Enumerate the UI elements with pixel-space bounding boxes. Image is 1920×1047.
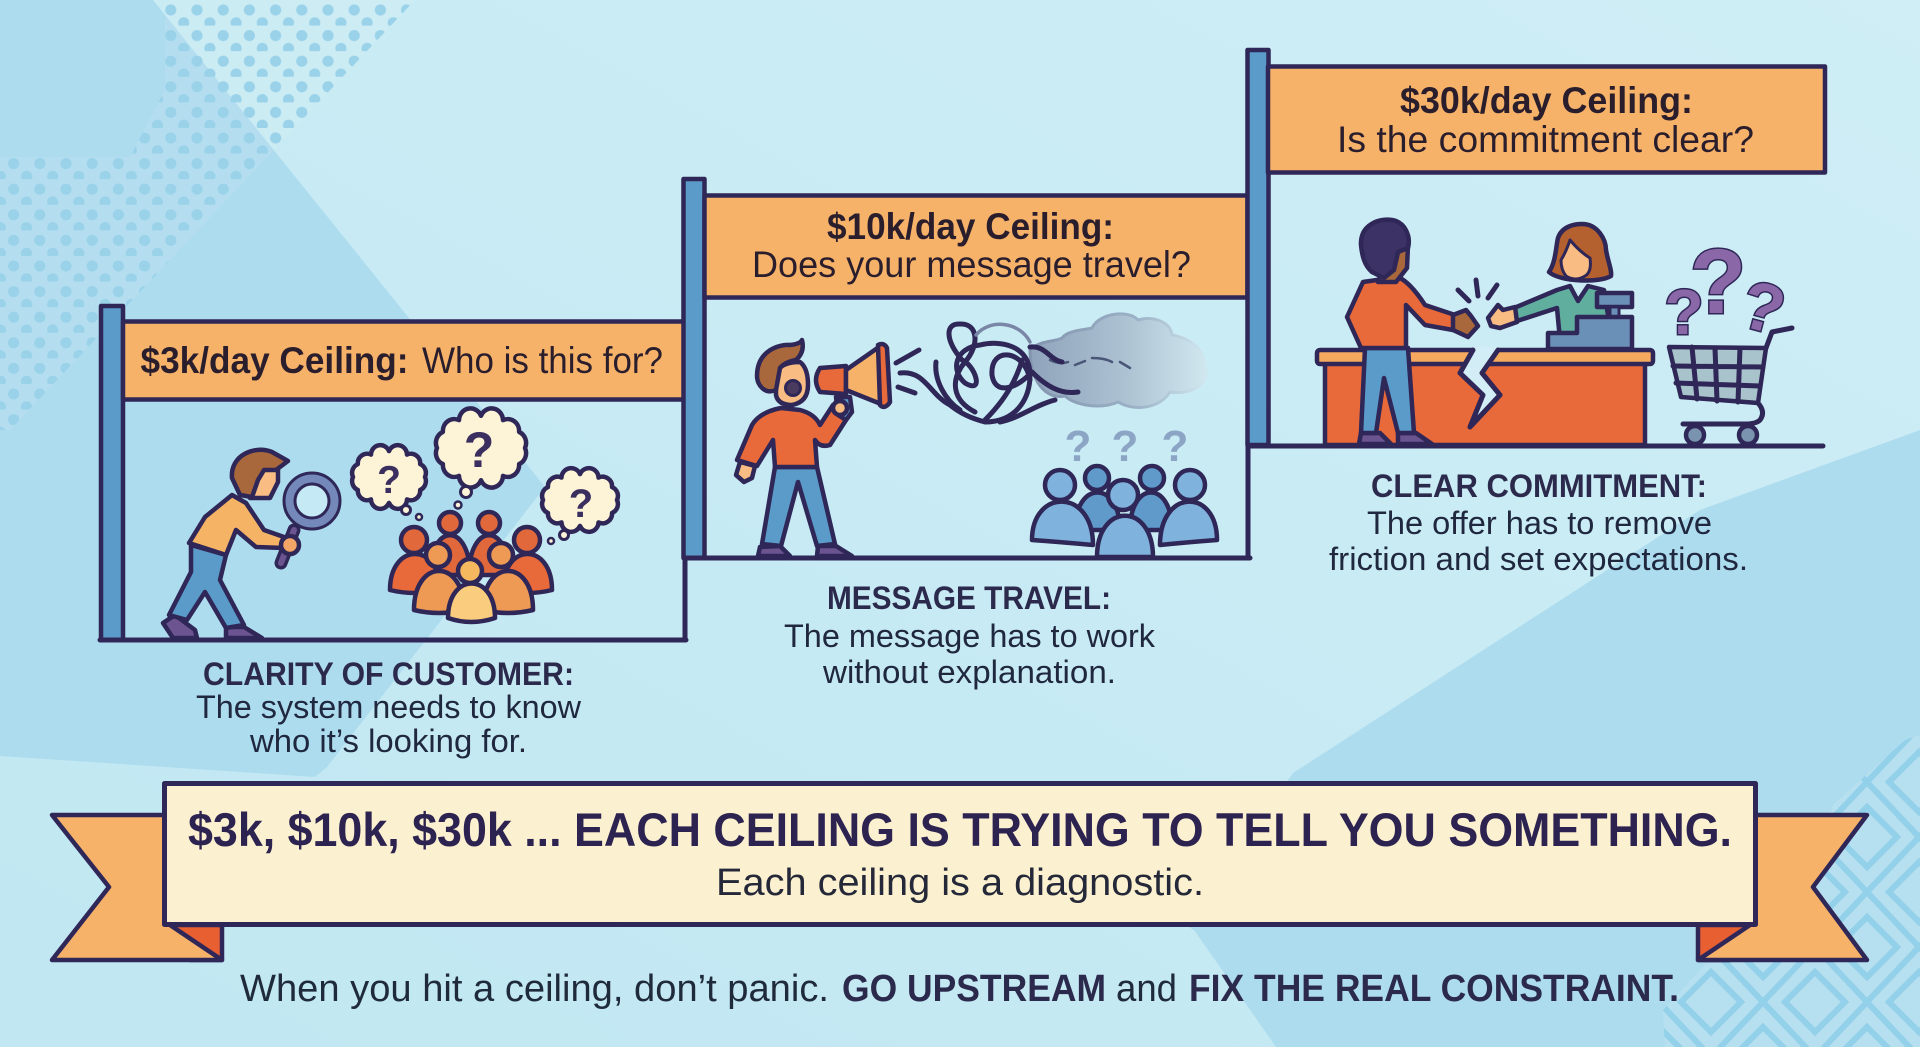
label: clear commitment: The offer has to remove [1367,505,1712,541]
structure: panel 3 frame [1248,50,1823,446]
structure: panel 2 frame [684,179,1250,558]
label: message travel: without explanation. [822,654,1116,690]
closing message: and [1116,968,1177,1010]
icon: cashier with register [1488,224,1632,349]
icon: confused blue audience: ? [1112,422,1138,471]
label: message travel: MESSAGE TRAVEL: [827,580,1111,616]
icon: customer [1347,220,1478,444]
label: clarity of customer: CLARITY OF CUSTOMER: [203,656,574,692]
icon: grey fog cloud [1030,314,1206,407]
icon: shopping cart with question marks: ? [1690,231,1746,333]
closing message: FIX THE REAL CONSTRAINT. [1189,968,1679,1010]
header: $10k ceiling [704,196,1248,298]
header: $30k ceiling: $30k/day Ceiling: [1400,80,1693,121]
header: $3k ceiling [123,322,685,400]
banner panel [164,784,1756,924]
icon: shopping cart with question marks [1664,231,1793,444]
panel: $3k ceiling [100,306,686,759]
header: $10k ceiling: Does your message travel? [752,244,1191,285]
icon: thought bubbles: ? [377,459,401,502]
ribbon tail: right [1698,815,1867,960]
icon: confused blue audience: ? [1162,422,1188,471]
header: $3k ceiling: Who is this for? [422,340,663,381]
icon: person with magnifying glass [163,450,334,638]
icon: sound lines [896,350,919,393]
label: clarity of customer [196,656,582,759]
label: clear commitment: friction and set expectations. [1329,541,1748,577]
closing message: When you hit a ceiling, don’t panic. [240,968,829,1010]
label: clear commitment: CLEAR COMMITMENT: [1371,468,1707,504]
icon: person with megaphone [736,340,890,556]
structure: panel 1 frame [100,306,686,640]
icon: thought bubbles [352,408,618,544]
icon: broken counter [1317,347,1653,445]
icon: thought bubbles: ? [569,482,593,526]
icon: orange crowd [390,512,552,622]
header: $10k ceiling: $10k/day Ceiling: [827,206,1114,247]
label: message travel [784,580,1156,690]
label: message travel: The message has to work [784,618,1156,654]
icon: confused blue audience: ? [1065,422,1091,471]
icon: tangled message line [900,324,1078,422]
header: $3k ceiling: $3k/day Ceiling: [140,340,408,381]
ribbon tail: left [52,815,222,960]
icon: shopping cart with question marks: ? [1664,276,1704,348]
label: clear commitment [1329,468,1748,577]
label: clarity of customer: The system needs to know [196,689,582,725]
banner subline: Each ceiling is a diagnostic. [716,862,1204,904]
banner headline: $3k, $10k, $30k ... EACH CEILING IS TRYING TO TELL YOU SOMETHING. [188,803,1732,856]
icon: shopping cart with question marks: ? [1733,266,1793,350]
closing message: GO UPSTREAM [842,968,1106,1010]
icon: thought bubbles: ? [464,422,494,478]
icon: confused blue audience [1032,422,1217,557]
banner ribbon [52,784,1867,960]
header: $30k ceiling: Is the commitment clear? [1337,119,1754,160]
panel: $30k ceiling [1248,50,1825,577]
label: clarity of customer: who it’s looking for. [249,723,527,759]
icon: impact lines [1458,280,1497,301]
panel: $10k ceiling [684,179,1250,690]
header: $30k ceiling [1268,66,1825,172]
